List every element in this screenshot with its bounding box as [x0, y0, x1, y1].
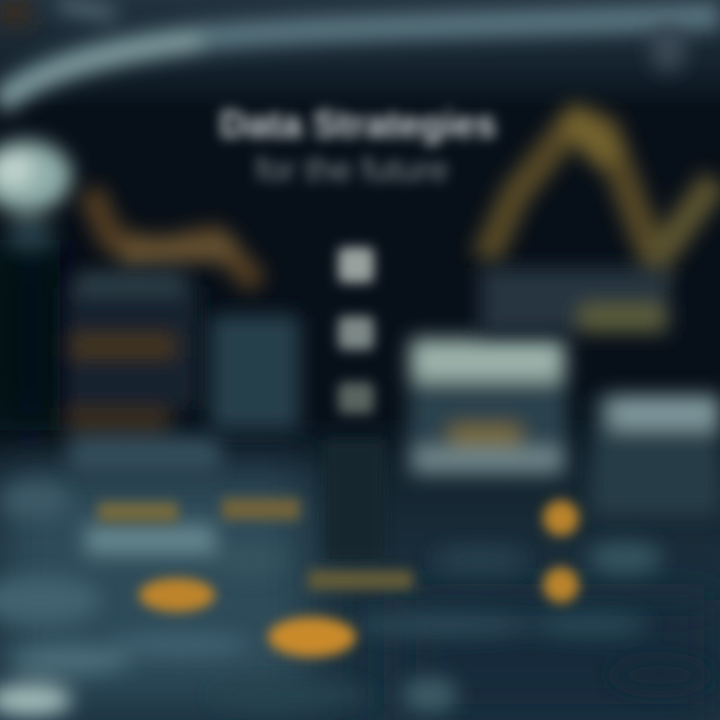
- panel: center-right card: [408, 335, 568, 474]
- gold coins: [139, 500, 579, 657]
- left bright blob: [0, 140, 72, 251]
- panel: middle-left card: [210, 315, 300, 430]
- icon: top right glyph: [650, 24, 686, 72]
- title: Data Strategies: [220, 104, 496, 146]
- panel: upper right card: [480, 268, 670, 333]
- panel: left card: [65, 272, 220, 472]
- left gold chart line: [90, 190, 258, 285]
- panel: right card: [592, 395, 720, 515]
- floor texture: [0, 482, 710, 716]
- center icons: [325, 247, 385, 560]
- top arc: [0, 0, 720, 106]
- right gold chart line: [485, 115, 715, 262]
- subtitle: for the future: [256, 151, 448, 189]
- gold labels: [98, 498, 413, 590]
